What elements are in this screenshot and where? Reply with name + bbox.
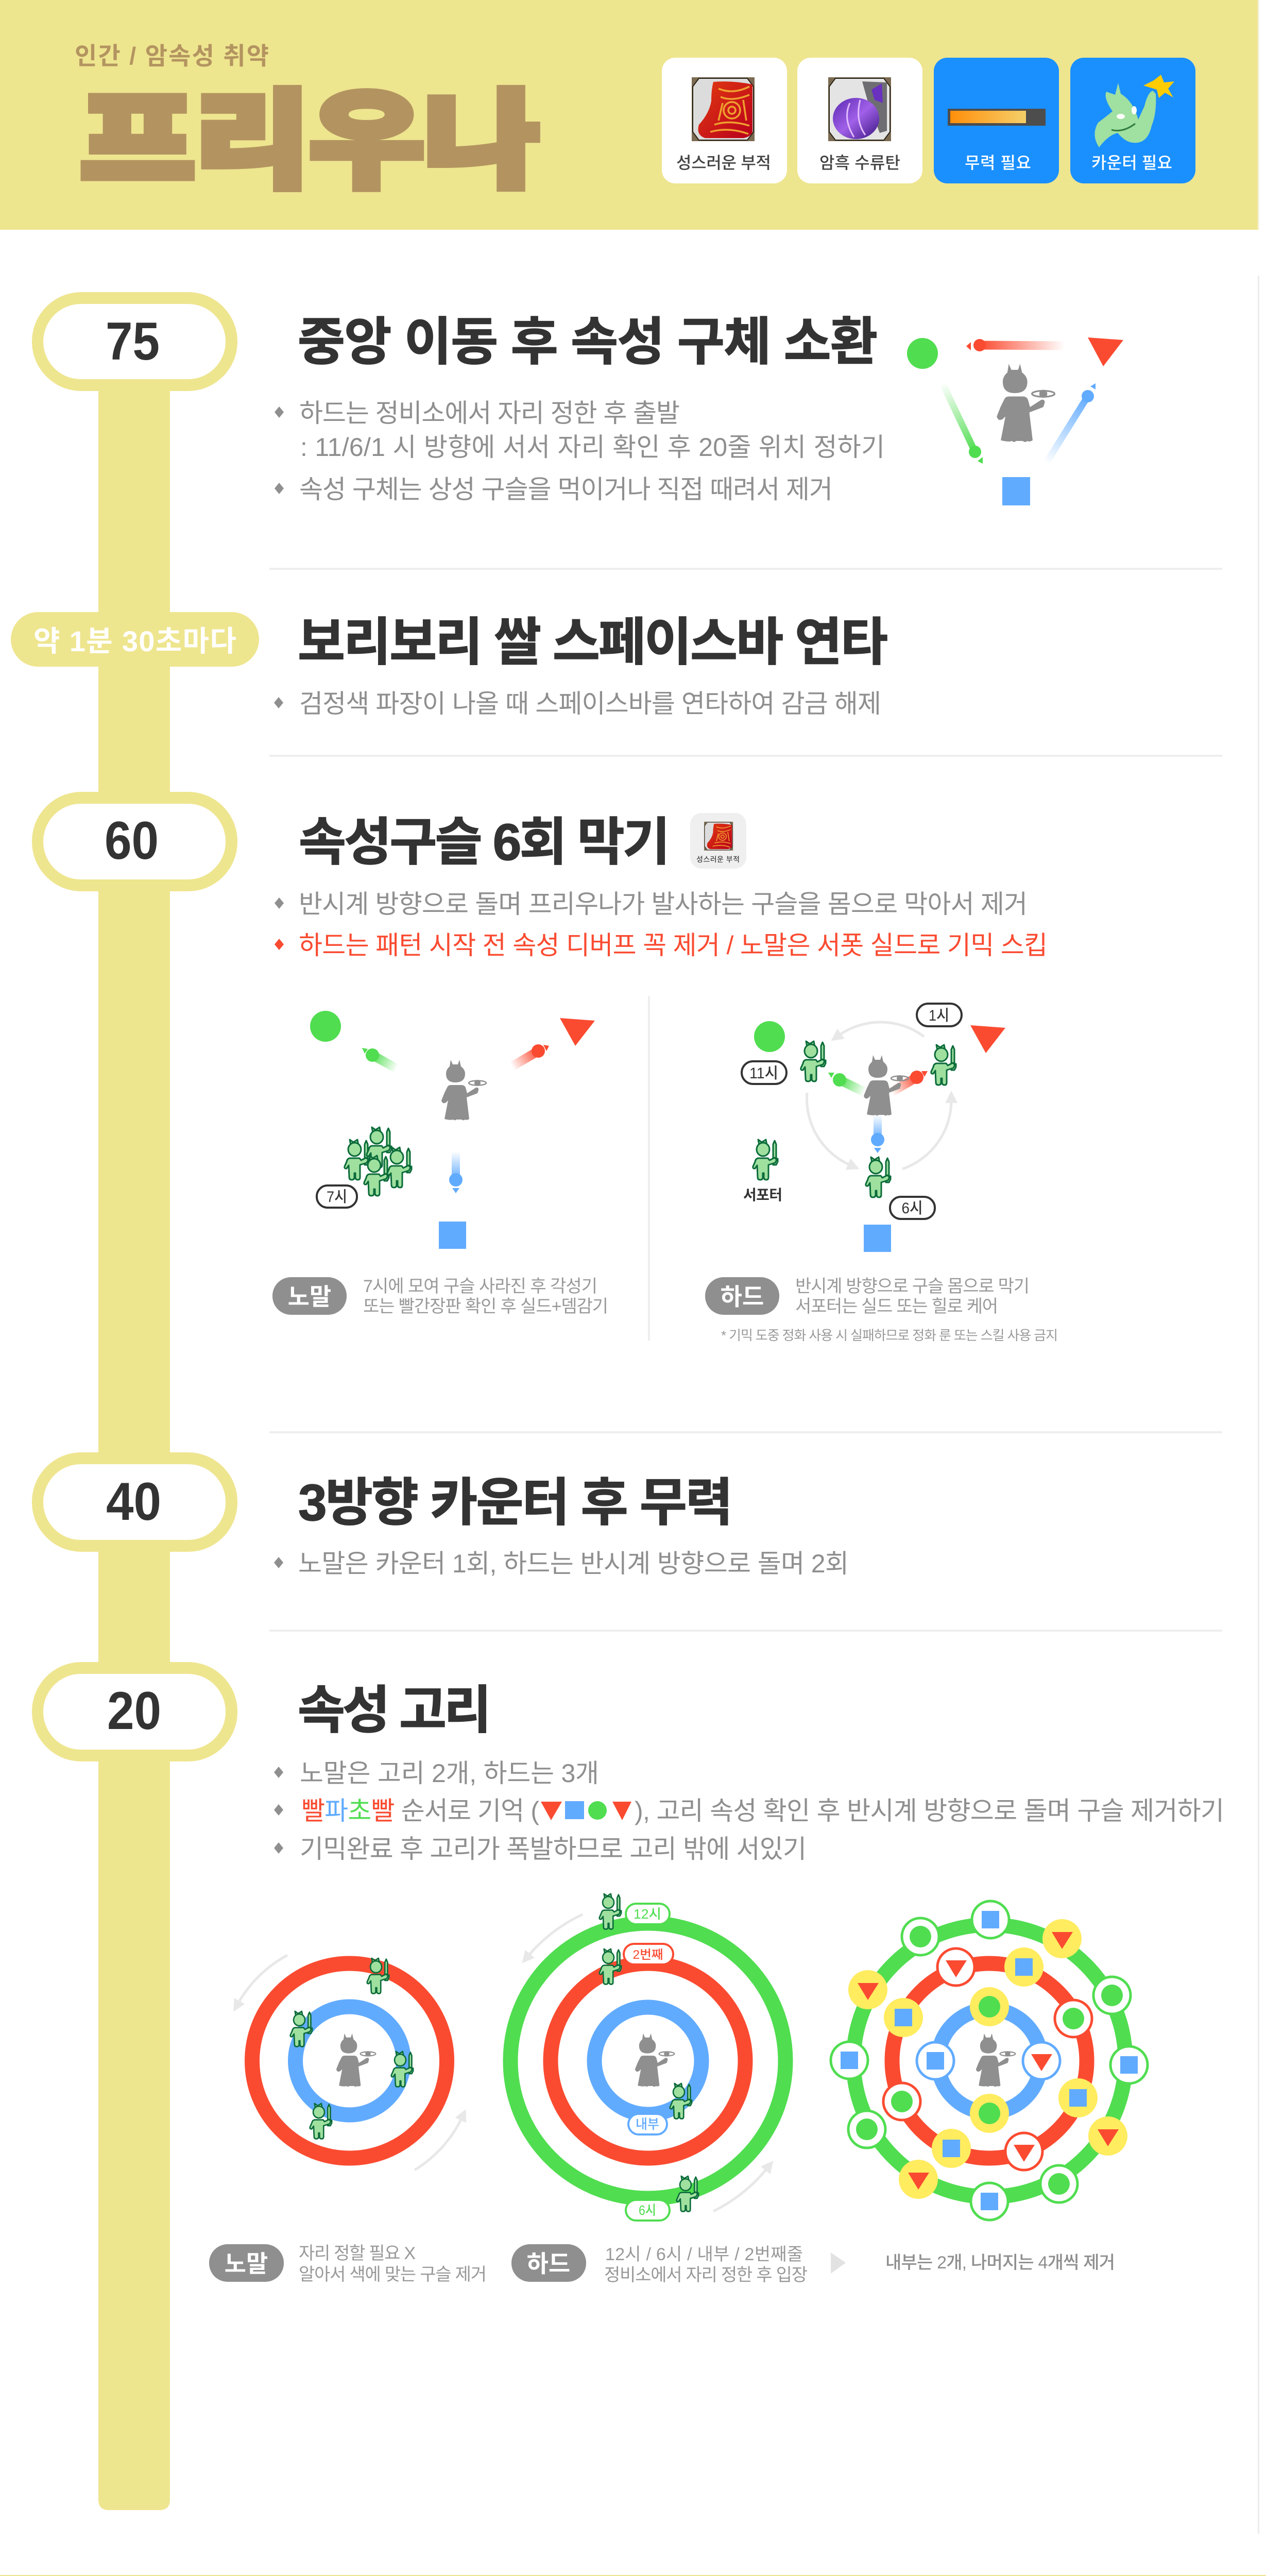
legend: hard: 반시계 방향으로 구슬 몸으로 막기 [795, 1277, 1030, 1296]
page edge line [1258, 276, 1259, 2534]
legend: normal: 7시에 모여 구슬 사라진 후 각성기 [363, 1277, 597, 1296]
card: holy talisman [662, 58, 787, 183]
summary text: 내부는 2개, 나머지는 4개씩 제거 [885, 2253, 1115, 2273]
label: second row: 2번째 [632, 1948, 663, 1962]
legend: normal: 알아서 색에 맞는 구슬 제거 [299, 2265, 487, 2284]
label: inner: 내부 [636, 2116, 659, 2132]
bullet text [275, 890, 1048, 960]
heading: 보리보리 쌀 스페이스바 연타 [298, 614, 888, 671]
legend: normal: 노말 [225, 2250, 268, 2277]
card: counter needed: 카운터 필요 [1091, 154, 1172, 172]
badge 75 [32, 292, 237, 391]
bullet text: 반시계 방향으로 돌며 프리우나가 발사하는 구슬을 몸으로 막아서 제거 [299, 890, 1028, 919]
label: 11 o'clock [742, 1061, 786, 1084]
card: dark grenade [797, 58, 922, 183]
label: inner [628, 2114, 667, 2134]
icon: holy talisman tag: 성스러운 부적 [696, 855, 740, 863]
footnote: * 기믹 도중 정화 사용 시 실패하므로 정화 룬 또는 스킬 사용 금지 [721, 1328, 1058, 1343]
footer [0, 2575, 1266, 2576]
badge 60: 60 [105, 811, 159, 871]
section: spacebar [274, 614, 888, 718]
bullet text [274, 1759, 1224, 1863]
legend: normal: 노말 [288, 1283, 331, 1310]
bullet text: 노말은 고리 2개, 하드는 3개 [300, 1759, 599, 1788]
label: second row [624, 1944, 673, 1964]
bullet text: 하드는 정비소에서 자리 정한 후 출발 [299, 399, 680, 428]
label: 6 o'clock: 6시 [901, 1200, 923, 1217]
diagram: element spheres [907, 337, 1123, 505]
card: holy talisman: 성스러운 부적 [676, 154, 771, 172]
legend: normal: 또는 빨간장판 확인 후 실드+뎀감기 [363, 1297, 608, 1316]
card: stagger needed: 무력 필요 [965, 154, 1031, 172]
label: 1 o'clock: 1시 [929, 1007, 949, 1024]
label: 6 o'clock: 6시 [639, 2202, 656, 2218]
diagram: normal rings [238, 1955, 462, 2170]
legend: normal [272, 1277, 608, 1316]
label: 12 o'clock [626, 1904, 670, 1924]
section 20 [209, 1682, 1224, 2285]
badge: every 1m30s: 약 1분 30초마다 [33, 625, 236, 657]
legend: hard: 하드 [527, 2250, 570, 2277]
card: dark grenade: 암흑 수류탄 [819, 154, 900, 172]
bullet text: 속성 구체는 상성 구슬을 먹이거나 직접 때려서 제거 [299, 475, 833, 504]
badge 20: 20 [107, 1681, 161, 1741]
label: 11 o'clock: 11시 [749, 1065, 778, 1082]
card: counter needed [1070, 58, 1195, 183]
heading: 3방향 카운터 후 무력 [298, 1474, 733, 1532]
legend: hard: 하드 [721, 1283, 764, 1310]
header band [0, 0, 1259, 230]
bullet text: : 11/6/1 시 방향에 서서 자리 확인 후 20줄 위치 정하기 [300, 433, 885, 462]
vertical divider [648, 996, 650, 1341]
badge 20 [32, 1662, 237, 1761]
divider [269, 1431, 1222, 1433]
heading: 속성구슬 6회 막기 [299, 814, 670, 871]
card: stagger needed [934, 58, 1059, 183]
label: 6 o'clock [890, 1197, 935, 1219]
timeline bar [98, 361, 170, 2510]
diagram: ring element nodes [831, 1901, 1148, 2220]
icon: holy talisman tag [690, 813, 746, 869]
legend: normal: 자리 정할 필요 X [299, 2244, 416, 2263]
legend: hard: 서포터는 실드 또는 힐로 케어 [795, 1297, 998, 1316]
bullet text: ), 고리 속성 확인 후 반시계 방향으로 돌며 구슬 제거하기 [635, 1797, 1224, 1825]
bullet text [275, 399, 885, 504]
label: 6 o'clock [626, 2200, 670, 2221]
badge 75: 75 [106, 312, 160, 371]
heading: 중앙 이동 후 속성 구체 소환 [298, 313, 878, 371]
section 75 [275, 313, 1123, 505]
bullet text: 하드는 패턴 시작 전 속성 디버프 꼭 제거 / 노말은 서폿 실드로 기믹 스킵 [299, 931, 1048, 960]
label: supporter: 서포터 [743, 1187, 782, 1203]
bullet text: 빨파초빨 순서로 기억 ( [301, 1797, 539, 1825]
divider [269, 1630, 1222, 1632]
badge 40: 40 [106, 1472, 161, 1532]
divider [269, 755, 1222, 757]
legend: hard [511, 2244, 808, 2285]
bullet text: 기믹완료 후 고리가 폭발하므로 고리 밖에 서있기 [300, 1835, 807, 1863]
diagram: hard [742, 1004, 1005, 1252]
diagram: hard rings [510, 1894, 785, 2221]
badge: every 1m30s [11, 612, 259, 667]
legend: hard: 12시 / 6시 / 내부 / 2번째줄 [605, 2245, 803, 2264]
bullet text: 노말은 카운터 1회, 하드는 반시계 방향으로 돌며 2회 [298, 1549, 849, 1578]
section 60 [272, 813, 1058, 1343]
legend: hard [705, 1277, 1030, 1316]
bullet text: 검정색 파장이 나올 때 스페이스바를 연타하여 감금 해제 [299, 689, 881, 718]
divider [269, 568, 1222, 570]
subtitle: weakness: 인간 / 암속성 취약 [75, 42, 269, 70]
label: 12 o'clock: 12시 [634, 1906, 661, 1922]
label: 1 o'clock [917, 1004, 962, 1026]
label: 7 o'clock: 7시 [327, 1189, 347, 1206]
legend: hard: 정비소에서 자리 정한 후 입장 [604, 2265, 808, 2285]
legend: normal [209, 2244, 487, 2284]
section 40 [274, 1474, 849, 1578]
heading: 속성 고리 [298, 1682, 491, 1739]
badge 60 [32, 792, 237, 891]
arrow [831, 2252, 846, 2274]
boss title: 프리우나 [80, 82, 539, 201]
badge 40 [32, 1452, 237, 1552]
diagram: normal [310, 1011, 595, 1249]
label: 7 o'clock [317, 1185, 357, 1208]
